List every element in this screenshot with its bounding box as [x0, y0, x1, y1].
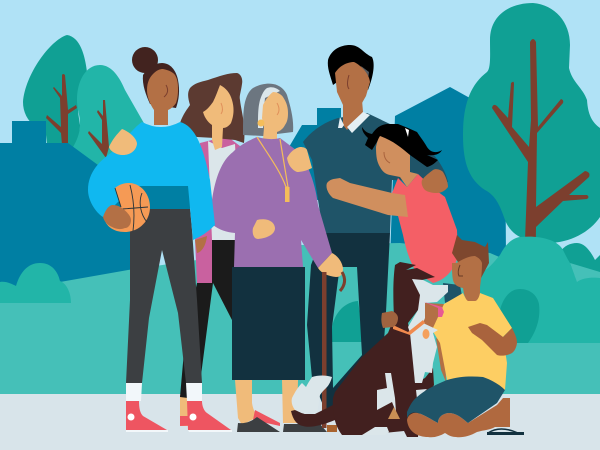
man face — [335, 62, 370, 109]
socks — [126, 383, 202, 401]
person: boy upper body — [423, 235, 517, 390]
dog — [291, 262, 448, 437]
hand on girl's shoulder — [422, 169, 448, 193]
white streak — [258, 87, 280, 128]
person: older woman in purple — [212, 84, 343, 432]
basketball — [104, 183, 150, 232]
window bush — [332, 301, 364, 342]
girl face and neck — [376, 136, 418, 187]
dog body — [333, 262, 435, 437]
girl arm — [326, 178, 408, 217]
woman cardigan — [195, 137, 240, 283]
waist band — [130, 186, 190, 209]
far right bush — [560, 243, 600, 275]
red shirt — [392, 174, 458, 283]
hand on shoulder — [109, 129, 137, 155]
walking cane — [322, 272, 345, 428]
face — [147, 69, 178, 112]
flip flop — [487, 429, 524, 435]
woman shirt — [208, 141, 240, 240]
shorts — [407, 376, 505, 423]
man collar — [338, 112, 370, 133]
dog tail — [291, 405, 340, 427]
left bush — [0, 263, 71, 303]
background houses — [0, 87, 506, 295]
ground — [0, 394, 600, 450]
man hair — [328, 45, 374, 90]
collar and tag — [393, 320, 430, 339]
leggings — [126, 208, 202, 383]
dark bush — [500, 289, 539, 343]
tongue — [424, 302, 444, 317]
blue sweater — [88, 122, 215, 240]
red shoes — [126, 401, 232, 432]
white face and chest — [408, 279, 448, 383]
woman ankle and shoe — [180, 395, 200, 426]
tail tip — [292, 376, 332, 414]
man shoes — [327, 419, 403, 432]
man trousers — [307, 233, 390, 420]
girl hair — [362, 124, 442, 167]
boy hair — [452, 235, 489, 280]
woman hair — [180, 73, 244, 143]
right tree — [463, 3, 600, 295]
tan patch — [388, 407, 400, 419]
boy's hand on dog — [381, 311, 398, 328]
person: man in teal sweater — [303, 45, 448, 432]
necklace and whistle — [257, 137, 290, 202]
left trees — [23, 35, 145, 170]
teal hillside — [0, 243, 600, 394]
face — [262, 92, 288, 139]
grey hair — [243, 84, 293, 136]
person: woman in pink cardigan — [180, 73, 244, 426]
large right bush — [480, 237, 600, 343]
woman trousers — [180, 240, 236, 398]
purple sweater — [212, 137, 332, 268]
man neck — [343, 100, 363, 130]
bushes — [0, 237, 600, 343]
boy arm — [468, 323, 517, 356]
white leg marks — [362, 373, 427, 435]
hand on cane — [318, 253, 343, 277]
lower wrist — [195, 236, 207, 253]
hand on ball — [103, 205, 131, 229]
hand on man's shoulder — [287, 147, 312, 172]
shadow behind dog nose — [443, 283, 462, 303]
bun and hair — [132, 47, 179, 108]
legs — [235, 380, 257, 425]
man sweater — [303, 113, 448, 233]
left forearm — [436, 338, 446, 382]
person: girl hugging — [326, 124, 458, 283]
boy face and neck — [452, 256, 482, 301]
person: boy lower body — [407, 376, 524, 437]
boy legs — [407, 398, 510, 437]
person: woman with basketball — [88, 47, 232, 432]
yellow shirt — [432, 293, 512, 390]
hand on sweater — [253, 219, 275, 239]
skirt — [232, 267, 305, 380]
woman face — [203, 85, 234, 150]
neck — [154, 105, 168, 125]
boy upper arm behind dog — [423, 303, 444, 330]
